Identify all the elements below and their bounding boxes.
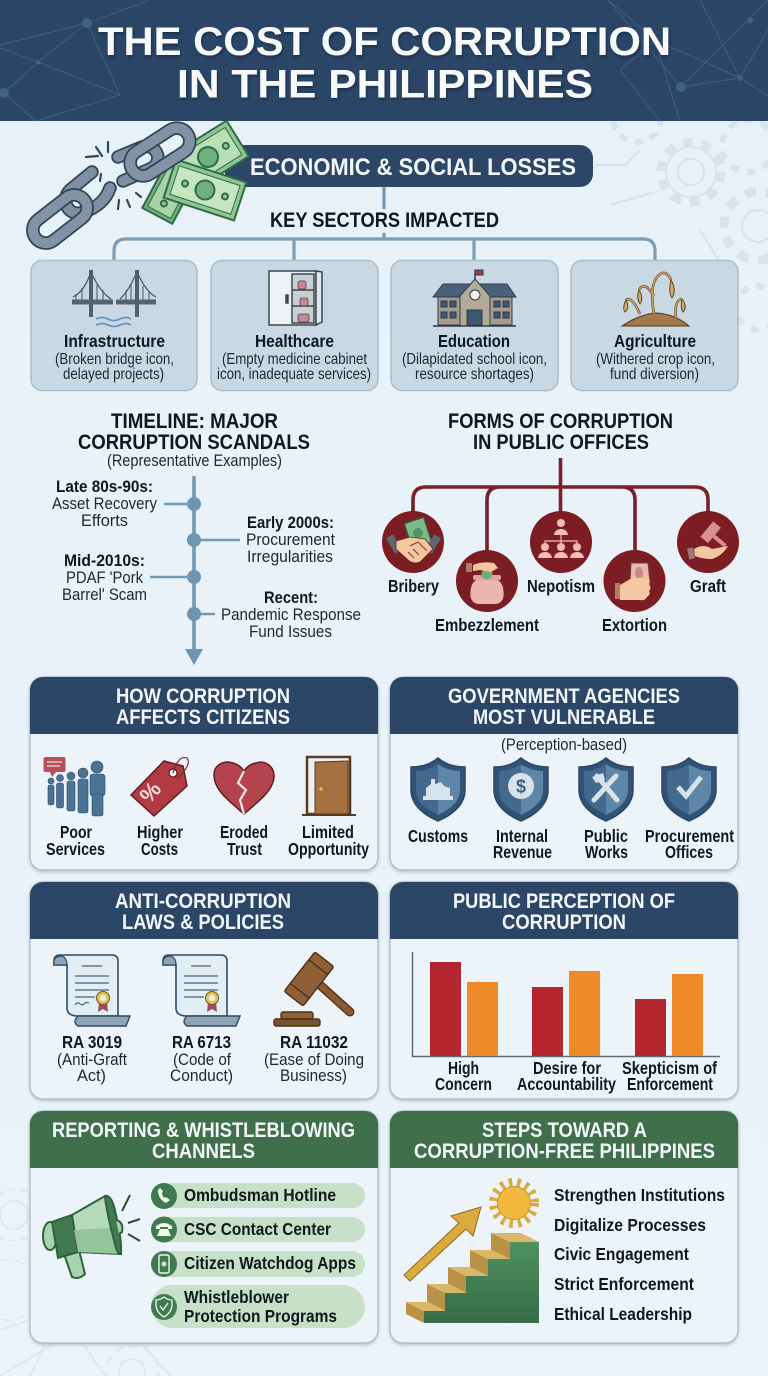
panel header: GOVERNMENT AGENCIES — [448, 684, 680, 708]
panel header: CHANNELS — [152, 1139, 255, 1163]
card: infrastructure: Infrastructure — [64, 331, 165, 351]
heading: timeline: CORRUPTION SCANDALS — [78, 430, 310, 454]
timeline event: mid-2010s: Barrel' Scam — [62, 585, 147, 604]
panel: anti-corruption laws: Act) — [77, 1066, 106, 1085]
icon: extortion — [604, 550, 666, 612]
panel: vulnerable agencies: Procurement — [645, 826, 734, 846]
icon: procurement shield — [662, 758, 716, 821]
icon: price tag: % — [134, 777, 166, 808]
card: education — [391, 260, 558, 390]
icon: bribery — [382, 511, 444, 573]
banner: economic & social losses: ECONOMIC & SOCIAL LOSSES — [250, 154, 576, 181]
channel: csc contact center — [151, 1216, 365, 1242]
icon: customs shield — [411, 758, 465, 821]
icon: withered crop — [622, 273, 689, 326]
heading: forms of corruption: IN PUBLIC OFFICES — [473, 430, 649, 454]
panel: public perception — [390, 882, 738, 1099]
card: agriculture: (Withered crop icon, — [596, 351, 715, 368]
panel: anti-corruption laws: Business) — [280, 1066, 347, 1085]
label: graft: Graft — [690, 576, 726, 596]
panel: steps toward corruption-free: Digitalize Processes — [554, 1215, 706, 1235]
panel header — [390, 882, 738, 939]
panel header — [390, 677, 738, 734]
card: education: resource shortages) — [415, 366, 534, 383]
timeline event: late 80s-90s: Asset Recovery — [52, 494, 157, 513]
title: THE COST OF CORRUPTION — [98, 20, 671, 64]
panel: public perception: Enforcement — [627, 1074, 713, 1094]
panel: public perception: Concern — [435, 1074, 492, 1094]
panel: anti-corruption laws: (Anti-Graft — [57, 1050, 127, 1069]
icon: staircase — [406, 1233, 539, 1323]
card: education: (Dilapidated school icon, — [402, 351, 547, 368]
panel header: ANTI-CORRUPTION — [115, 889, 291, 913]
panel header: REPORTING & WHISTLEBLOWING — [52, 1118, 355, 1142]
panel: how corruption affects citizens: Limited — [302, 822, 354, 842]
icon: school — [433, 270, 516, 326]
panel: anti-corruption laws: RA 3019 — [62, 1032, 122, 1052]
icon: price tag — [131, 758, 188, 816]
icon: scroll ra 3019 — [54, 955, 130, 1026]
icon: open door — [302, 757, 356, 815]
channel: ombudsman hotline: Ombudsman Hotline — [184, 1185, 336, 1205]
panel: vulnerable agencies: Public — [584, 826, 628, 846]
panel header: CORRUPTION — [502, 910, 626, 934]
panel header — [390, 1111, 738, 1168]
note: perception-based: (Perception-based) — [501, 735, 627, 754]
panel: how corruption affects citizens: Opportunity — [288, 839, 369, 859]
connector: forms tree — [413, 458, 708, 555]
icon: embezzlement — [456, 550, 518, 612]
banner: economic & social losses — [225, 145, 593, 187]
panel: how corruption affects citizens: Higher — [137, 822, 183, 842]
icon: queue of people — [44, 757, 105, 816]
channel: whistleblower protection: Protection Programs — [184, 1306, 337, 1326]
label: extortion: Extortion — [602, 615, 667, 635]
timeline event: early 2000s: Irregularities — [247, 547, 333, 566]
icon: broken heart — [214, 762, 274, 814]
timeline event: early 2000s — [246, 513, 335, 566]
panel: how corruption affects citizens — [30, 677, 378, 870]
icon: sun — [493, 1182, 535, 1224]
channel: citizen watchdog apps — [151, 1251, 365, 1277]
panel: anti-corruption laws: (Ease of Doing — [264, 1050, 364, 1069]
panel: steps toward corruption-free: Strict Enforcement — [554, 1274, 694, 1294]
card: infrastructure — [31, 260, 197, 390]
icon: medicine cabinet — [269, 271, 322, 325]
chart: timeline axis — [150, 476, 240, 665]
panel: anti-corruption laws: (Code of — [173, 1050, 231, 1069]
timeline event: recent: Fund Issues — [249, 622, 332, 641]
timeline event: mid-2010s: Mid-2010s: — [64, 551, 145, 570]
timeline event: recent: Recent: — [264, 588, 318, 607]
panel: vulnerable agencies: Offices — [665, 842, 713, 862]
icon: revenue shield: $ — [516, 776, 526, 796]
panel: vulnerable agencies — [390, 677, 738, 870]
panel: public perception: Desire for — [533, 1058, 601, 1078]
panel header: PUBLIC PERCEPTION OF — [453, 889, 675, 913]
panel: steps toward corruption-free: Strengthen Institutions — [554, 1185, 725, 1205]
bar chart — [412, 952, 720, 1056]
panel: vulnerable agencies: Works — [585, 842, 628, 862]
panel: vulnerable agencies: Customs — [408, 826, 468, 846]
title: IN THE PHILIPPINES — [177, 62, 593, 106]
panel: anti-corruption laws — [30, 882, 378, 1099]
card: infrastructure: (Broken bridge icon, — [55, 351, 174, 368]
icon: graft — [677, 511, 739, 573]
panel: public perception: Accountability — [517, 1074, 616, 1094]
icon: revenue shield — [494, 758, 548, 821]
icon: scroll ra 6713 — [163, 955, 240, 1026]
panel: steps toward corruption-free: Civic Engagement — [554, 1244, 689, 1264]
icon: public works shield — [579, 758, 633, 821]
card: agriculture — [571, 260, 738, 390]
icon: broken chain — [28, 123, 195, 248]
heading: forms of corruption: FORMS OF CORRUPTION — [448, 409, 673, 433]
card: agriculture: Agriculture — [614, 331, 696, 351]
card: education: Education — [438, 331, 510, 351]
panel: reporting channels — [30, 1111, 378, 1343]
icon: nepotism — [530, 511, 592, 573]
timeline event: recent — [221, 588, 361, 641]
timeline event: early 2000s: Procurement — [246, 530, 335, 549]
panel: anti-corruption laws: Conduct) — [170, 1066, 233, 1085]
icon: money bills — [142, 121, 249, 224]
timeline event: late 80s-90s: Efforts — [81, 511, 128, 530]
channel: csc contact center: CSC Contact Center — [184, 1219, 331, 1239]
connector: to key sectors — [382, 187, 386, 209]
connector: sector tree — [114, 233, 655, 260]
heading: timeline — [78, 409, 310, 470]
heading: key sectors impacted: KEY SECTORS IMPACTED — [270, 209, 499, 232]
timeline event: late 80s-90s: Late 80s-90s: — [56, 477, 153, 496]
panel: public perception: High — [448, 1058, 479, 1078]
card: healthcare: (Empty medicine cabinet — [222, 351, 367, 368]
label: bribery: Bribery — [388, 576, 439, 596]
label: nepotism: Nepotism — [527, 576, 595, 596]
panel: steps toward corruption-free: Ethical Leadership — [554, 1304, 692, 1324]
card: healthcare: Healthcare — [255, 331, 334, 351]
header banner — [0, 0, 768, 125]
icon: rising arrow — [404, 1207, 481, 1281]
panel: how corruption affects citizens: Services — [46, 839, 105, 859]
heading: forms of corruption — [448, 409, 673, 454]
panel header: HOW CORRUPTION — [116, 684, 290, 708]
icon: megaphone — [43, 1195, 140, 1278]
card: agriculture: fund diversion) — [610, 366, 699, 383]
timeline event: mid-2010s — [62, 551, 147, 604]
panel header — [30, 882, 378, 939]
panel: vulnerable agencies: Internal — [496, 826, 548, 846]
channel: citizen watchdog apps: Citizen Watchdog Apps — [184, 1253, 356, 1273]
timeline event: recent: Pandemic Response — [221, 605, 361, 624]
timeline event: early 2000s: Early 2000s: — [247, 513, 334, 532]
panel: how corruption affects citizens: Trust — [227, 839, 262, 859]
panel header: STEPS TOWARD A — [482, 1118, 647, 1142]
panel: anti-corruption laws: RA 11032 — [280, 1032, 348, 1052]
timeline event: mid-2010s: PDAF 'Pork — [66, 568, 143, 587]
icon: gavel — [274, 952, 350, 1026]
panel header — [30, 677, 378, 734]
heading: timeline: TIMELINE: MAJOR — [111, 409, 278, 433]
timeline event: late 80s-90s — [52, 477, 157, 530]
panel header: AFFECTS CITIZENS — [116, 705, 290, 729]
panel header: MOST VULNERABLE — [473, 705, 655, 729]
title — [98, 20, 671, 106]
panel: public perception: Skepticism of — [622, 1058, 717, 1078]
label: embezzlement: Embezzlement — [435, 615, 539, 635]
channel: ombudsman hotline — [151, 1183, 365, 1209]
panel header: LAWS & POLICIES — [122, 910, 284, 934]
icon: broken bridge — [72, 270, 156, 326]
panel: vulnerable agencies: Revenue — [493, 842, 552, 862]
card: healthcare: icon, inadequate services) — [217, 366, 371, 383]
card: healthcare — [211, 260, 378, 390]
channel: whistleblower protection — [151, 1285, 365, 1328]
panel: how corruption affects citizens: Costs — [141, 839, 178, 859]
heading: timeline: (Representative Examples) — [107, 451, 282, 470]
panel header: CORRUPTION-FREE PHILIPPINES — [414, 1139, 715, 1163]
panel header — [30, 1111, 378, 1168]
panel: how corruption affects citizens: Poor — [60, 822, 92, 842]
channel: whistleblower protection: Whistleblower — [184, 1287, 289, 1307]
panel: how corruption affects citizens: Eroded — [220, 822, 268, 842]
panel: anti-corruption laws: RA 6713 — [172, 1032, 231, 1052]
panel: steps toward corruption-free — [390, 1111, 738, 1343]
card: infrastructure: delayed projects) — [63, 366, 164, 383]
